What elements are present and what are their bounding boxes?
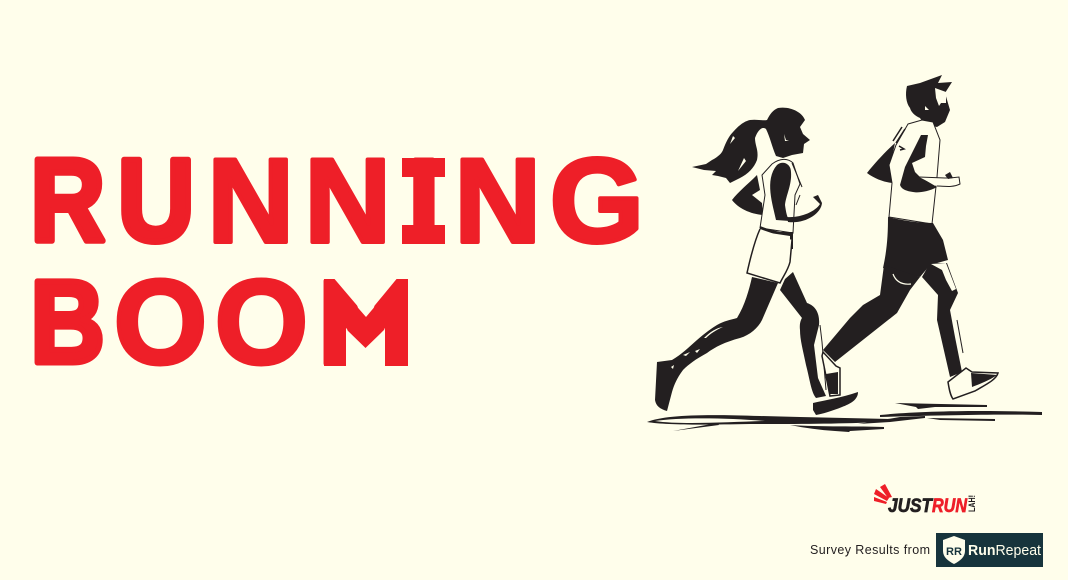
head and hair [906,75,952,127]
logo rays [874,484,892,504]
shorts [883,217,948,277]
forearm and fist [787,195,822,222]
ear highlight [925,106,929,110]
shorts trim [893,274,911,284]
ear and hair highlights [730,134,789,171]
man rear shoe (behind woman's calf) [822,352,840,396]
logo: RunRepeat [936,533,1043,567]
title: Running Boom: N [304,134,391,268]
runner: woman [655,108,858,415]
rear arm [867,143,895,183]
front leg [780,272,826,398]
title: Running Boom: I [407,134,441,268]
rear leg highlights [671,327,723,369]
inner arm [770,163,791,221]
forearm [919,177,960,186]
title: Running Boom: R [30,134,105,266]
skirt [747,229,792,283]
source caption: Survey Results from [810,543,930,557]
title: Running Boom: N [454,134,541,268]
waist band [760,226,793,249]
face highlight [935,88,946,106]
logo wordmark: JUST [888,496,933,517]
torso [889,120,940,224]
logo: RunRepeat: RunRepeat [968,543,1041,559]
shoe [948,368,998,399]
logo: JustRun: RUN [932,496,968,517]
hair and head [692,108,810,183]
logo: JustRun: LAH! [967,495,977,512]
shin line [957,320,963,353]
illustration: two runners [647,75,1042,432]
arm shadow [900,135,937,192]
front leg [922,263,962,377]
shoulder hatching [893,127,905,150]
shield [943,536,965,564]
fist [945,172,953,179]
rear leg [823,265,920,362]
title: Running Boom [30,134,644,390]
title: Running Boom: B [30,257,105,388]
title: Running Boom: U [118,134,195,266]
title: Running Boom: O [215,256,308,390]
runner: man [823,75,998,399]
title: Running Boom: O [114,256,207,390]
title: Running Boom: G [550,134,644,268]
front leg outline [820,325,826,390]
front shoe [813,392,858,415]
logo: RunRepeat: RR [946,546,962,558]
rear leg [655,277,778,411]
back arm [732,175,763,215]
logo: JustRun [874,484,977,517]
title: Running Boom: M [318,255,414,389]
top outline [760,159,800,233]
ground strokes [647,403,1042,432]
leg highlights [931,263,956,291]
title: Running Boom: N [207,134,294,268]
